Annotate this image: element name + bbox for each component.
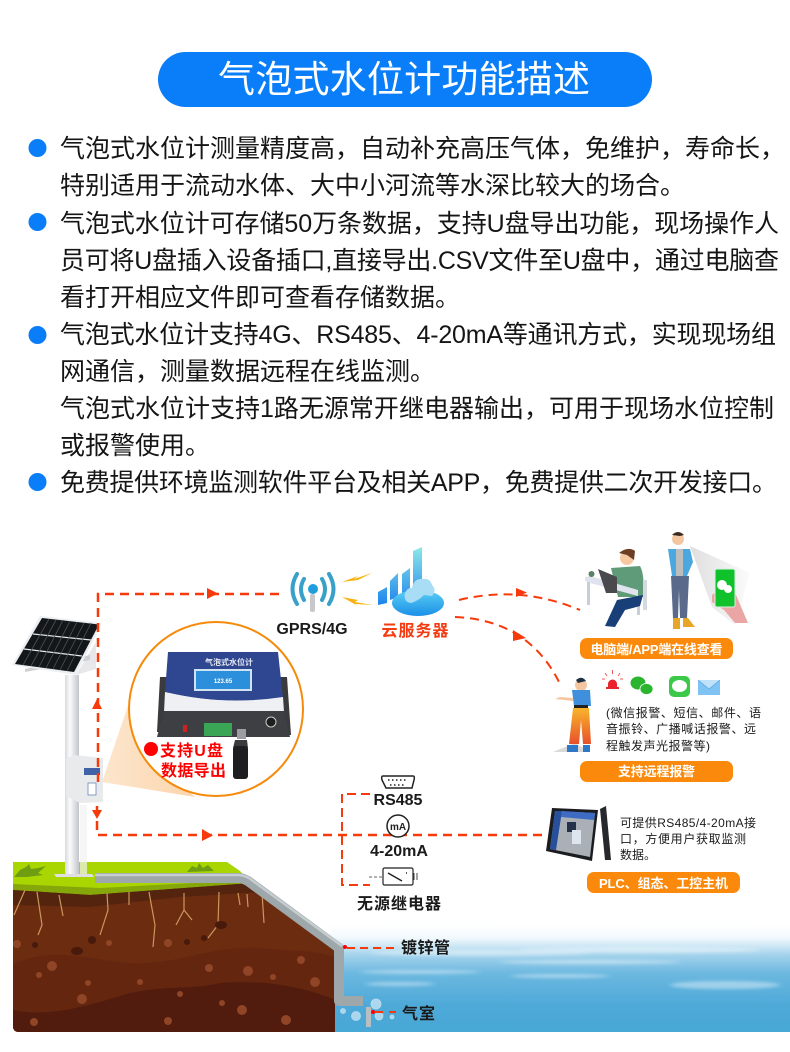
icon: RS485 connector [382, 776, 414, 788]
left link: arrow up to GPRS [92, 588, 280, 782]
galvanized pipe [95, 875, 363, 1001]
label pill: online view [580, 638, 733, 659]
bullet 1 text [28, 135, 785, 200]
icon: wechat [630, 676, 653, 694]
callout: galvanized pipe: 镀锌管 [401, 938, 450, 957]
icon: person at laptop [585, 549, 647, 627]
device: 气泡式水位计 [205, 657, 253, 667]
label pill: PLC: PLC、组态、工控主机 [599, 876, 728, 891]
icon: mA meter: mA [390, 822, 406, 833]
alarm methods text: 音振铃、广播喊话报警、远 [606, 721, 756, 736]
alarm icons row [602, 670, 720, 697]
signal icon: GPRS/4G [276, 574, 348, 638]
feature list [28, 135, 785, 497]
solar panel [12, 616, 102, 675]
panel PC note: 口，方便用户获取监测 [620, 831, 746, 846]
icon: mA meter [387, 815, 409, 837]
lightning bolts [342, 573, 373, 606]
bullet 2 text [28, 210, 779, 312]
label pill: PLC [587, 872, 740, 893]
data logger box [66, 755, 103, 803]
relay label: 无源继电器 [357, 894, 441, 913]
label pill: remote alarm: 支持远程报警 [618, 764, 695, 779]
4-20mA label: 4-20mA [370, 843, 428, 860]
callout: air chamber: 气室 [402, 1004, 435, 1023]
bullet 1 text: 特别适用于流动水体、大中小河流等水深比较大的场合。 [60, 172, 685, 200]
icon: relay [369, 868, 417, 885]
panel PC note: 可提供RS485/4-20mA接 [620, 815, 756, 830]
usb stick [233, 729, 248, 779]
label pill: remote alarm [580, 761, 733, 782]
bullet 3 text: 气泡式水位计支持4G、RS485、4-20mA等通讯方式，实现现场组 [60, 321, 776, 349]
magnifier callout: U disk export [102, 622, 303, 797]
icon: siren [602, 670, 623, 689]
callout text: 数据导出 [161, 762, 226, 780]
arrow: cloud to online view [459, 588, 580, 610]
zoom cone [102, 700, 195, 797]
bullet 3 text: 或报警使用。 [60, 432, 210, 460]
bullet 2 text: 员可将U盘插入设备插口,直接导出.CSV文件至U盘中，通过电脑查 [60, 247, 779, 275]
icon: mail [698, 680, 720, 695]
ground cross-section [13, 862, 335, 1032]
bullet 4 text: 免费提供环境监测软件平台及相关APP，免费提供二次开发接口。 [60, 469, 777, 497]
pole [54, 675, 94, 877]
air chamber with bubbles [340, 999, 394, 1027]
label pill: online view: 电脑端/APP端在线查看 [590, 642, 722, 657]
panel PC note: 数据。 [620, 847, 656, 862]
lower link: to PLC [92, 806, 548, 841]
callout text [144, 741, 226, 780]
bullet 2 text: 气泡式水位计可存储50万条数据，支持U盘导出功能，现场操作人 [60, 210, 779, 238]
grass [13, 862, 252, 896]
interface bracket [342, 794, 370, 885]
panel PC note [620, 815, 756, 862]
alarm methods text: (微信报警、短信、邮件、语 [606, 705, 761, 720]
bullet 3 text: 网通信，测量数据远程在线监测。 [60, 358, 435, 386]
soil pebbles [13, 939, 320, 1026]
soil [13, 883, 335, 1032]
bullet 2 text: 看打开相应文件即可查看存储数据。 [60, 284, 460, 312]
bullet 1 text: 气泡式水位计测量精度高，自动补充高压气体，免维护，寿命长， [60, 135, 785, 163]
icon: industrial panel PC [546, 806, 611, 861]
icon: message [669, 676, 690, 697]
title: 气泡式水位计功能描述 [218, 59, 590, 100]
title [158, 52, 652, 107]
cloud server icon [378, 547, 448, 640]
water background [330, 925, 790, 1032]
roots [14, 890, 264, 947]
callout: galvanized pipe [343, 938, 450, 957]
alarm methods text: 程触发声光报警等) [606, 738, 710, 753]
signal icon: GPRS/4G: GPRS/4G [276, 621, 348, 638]
arrow: cloud to alarm [455, 617, 561, 686]
icon: person on phone [553, 678, 591, 752]
bullet 3 text: 气泡式水位计支持1路无源常开继电器输出，可用于现场水位控制 [60, 395, 774, 423]
callout: air chamber [371, 1004, 435, 1023]
bullet 3 text [28, 321, 776, 460]
device: 123.65 [214, 679, 233, 685]
callout text: 支持U盘 [160, 741, 223, 760]
device [157, 652, 291, 737]
cloud server icon: 云服务器 [382, 621, 448, 640]
RS485 label: RS485 [374, 792, 423, 809]
icon: person with phone [668, 532, 750, 629]
alarm methods text [606, 705, 761, 753]
